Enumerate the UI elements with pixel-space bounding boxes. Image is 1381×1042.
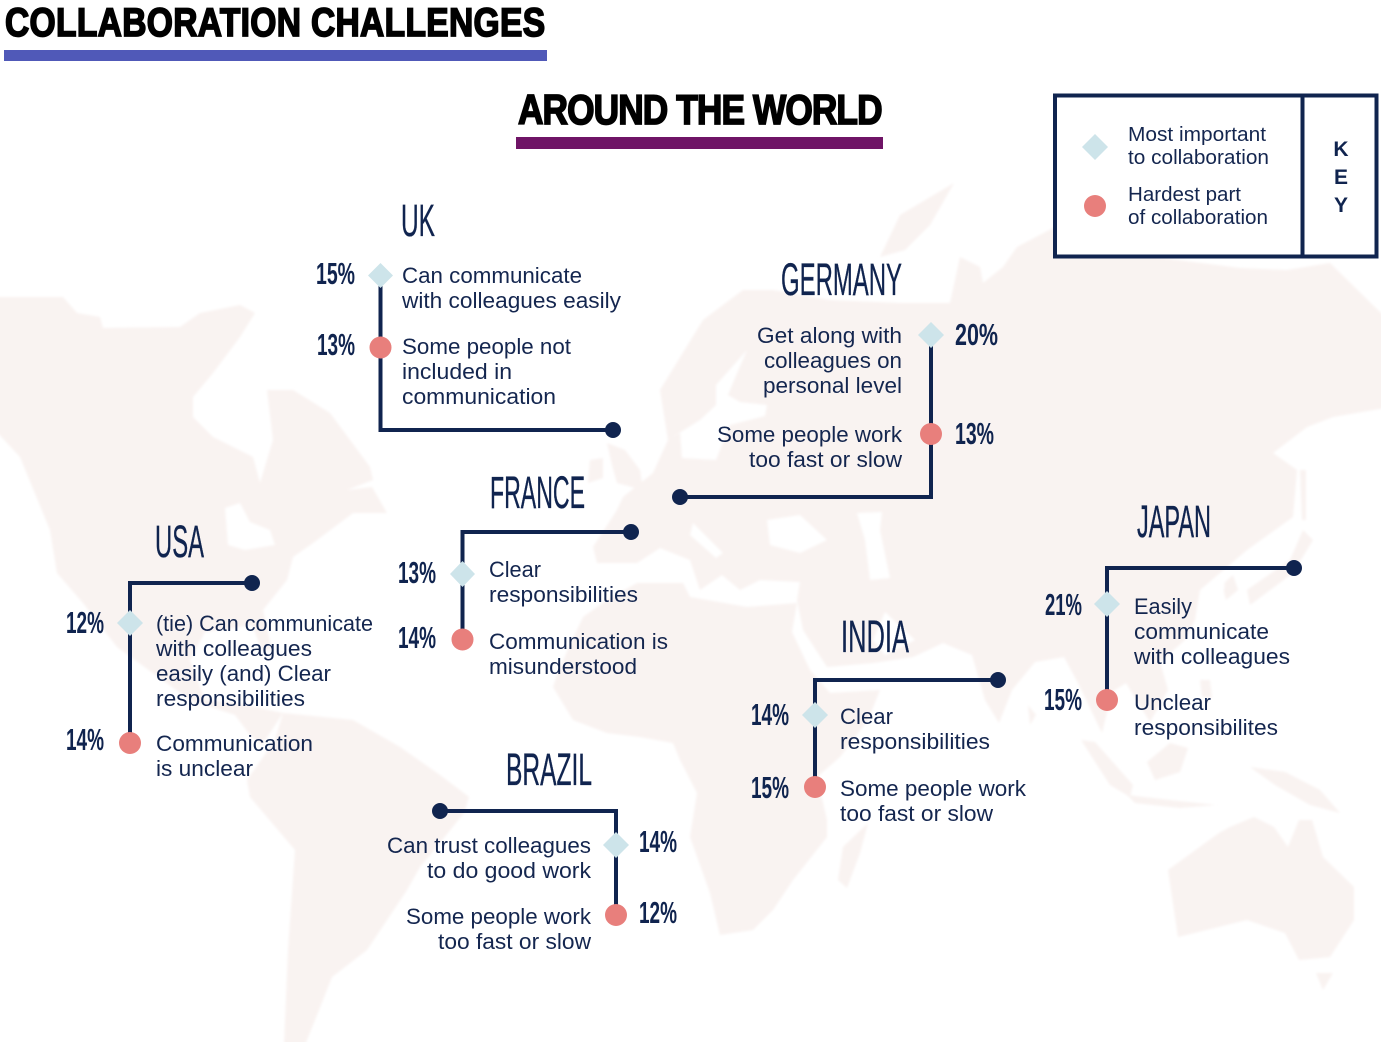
icon: France diamond [450,561,475,587]
text: Germany hardest: Some people work [717,422,903,447]
heading: Brazil: BRAZIL [506,744,592,795]
text: France hardest: Communication is [489,629,668,654]
panel: Japan [1044,496,1302,740]
text: India most important: responsibilities [840,729,990,754]
text: Brazil most important: to do good work [427,858,592,883]
key text: most important [1128,124,1269,169]
icon: Brazil dot [432,803,448,819]
heading: India: INDIA [841,611,909,662]
text: Brazil most important [387,833,592,883]
text: UK most important [401,263,621,313]
icon: India dot [990,672,1006,688]
text: India hardest [840,776,1027,826]
text: Germany hardest [717,422,903,472]
key text: hardest part [1128,184,1268,229]
value: Japan 15%: 15% [1044,682,1082,717]
value: Brazil 14%: 14% [639,824,677,859]
key label [1333,138,1349,217]
value: Germany 13%: 13% [955,416,994,451]
connector: UK [380,275,613,430]
panel: Germany [672,254,998,505]
value: Brazil 12%: 12% [639,895,677,930]
text: India most important [840,704,990,754]
title: COLLABORATION CHALLENGES [5,0,545,45]
text: France hardest [489,629,668,679]
value: India 15%: 15% [751,770,789,805]
text: France hardest: misunderstood [489,654,637,679]
text: Japan most important: communicate [1134,619,1269,644]
text: USA most important [155,611,373,711]
icon: USA circle [119,732,141,754]
icon: Japan circle [1096,689,1118,711]
icon: France circle [452,628,474,650]
icon: UK diamond [368,263,393,288]
text: Brazil hardest: too fast or slow [438,929,591,954]
connector: Germany [680,335,931,497]
text: Japan most important: with colleagues [1133,644,1290,669]
icon: Japan diamond [1094,591,1120,617]
text: USA most important: (tie) Can communicate [156,611,373,636]
key label: Y [1334,194,1348,217]
key text: hardest part: Hardest part [1128,184,1241,206]
icon: diamond key [1082,134,1108,160]
heading: Japan: JAPAN [1137,496,1211,547]
text: India most important: Clear [840,704,893,729]
text: USA most important: easily (and) Clear [156,661,331,686]
text: France most important: responsibilities [489,582,638,607]
text: UK most important: Can communicate [402,263,582,288]
icon: USA dot [244,575,260,591]
icon: UK dot [605,422,621,438]
text: France most important [489,557,638,607]
icon: USA diamond [117,610,143,636]
icon: Brazil diamond [603,832,629,858]
text: Japan hardest: responsibilites [1134,715,1278,740]
text: Japan hardest [1134,690,1278,740]
value: Germany 20%: 20% [955,317,998,352]
key text: most important: to collaboration [1128,147,1269,169]
text: Germany hardest: too fast or slow [749,447,902,472]
panel: India [751,611,1027,826]
text: Brazil hardest [406,904,592,954]
subtitle: AROUND THE WORLD [518,87,883,134]
value: UK 15%: 15% [316,256,355,291]
icon: India circle [804,776,826,798]
heading: France: FRANCE [490,467,585,518]
icon: Japan dot [1286,560,1302,576]
text: Germany most important: colleagues on [764,348,902,373]
value: France 14%: 14% [398,620,436,655]
text: USA most important: responsibilities [156,686,305,711]
text: UK most important: with colleagues easily [401,288,621,313]
value: India 14%: 14% [751,697,789,732]
text: Germany most important: Get along with [757,323,902,348]
connector: France [462,532,631,639]
value: USA 12%: 12% [66,605,104,640]
text: India hardest: too fast or slow [840,801,993,826]
text: Japan most important [1133,594,1290,669]
icon: Germany dot [672,489,688,505]
panel: Brazil [387,744,677,954]
value: UK 13%: 13% [317,327,355,362]
heading: USA: USA [155,516,204,567]
key text: hardest part: of collaboration [1128,207,1268,229]
icon: UK circle [370,336,392,358]
map inland water [225,350,1225,655]
value: Japan 21%: 21% [1045,587,1082,622]
text: Brazil hardest: Some people work [406,904,592,929]
panel: USA [66,516,373,781]
connector: India [815,680,998,787]
text: Japan most important: Easily [1134,594,1192,619]
connector: Japan [1107,568,1294,700]
panel: France [398,467,668,679]
text: France most important: Clear [489,557,541,582]
text: USA most important: with colleagues [155,636,312,661]
connector: USA [130,583,252,743]
heading: UK: UK [401,195,435,246]
text: India hardest: Some people work [840,776,1027,801]
value: USA 14%: 14% [66,722,104,757]
text: UK hardest: communication [402,384,556,409]
text: Germany most important: personal level [763,373,902,398]
key label: E [1334,166,1348,189]
text: UK hardest: included in [402,359,512,384]
text: UK hardest [402,334,571,409]
text: Japan hardest: Unclear [1134,690,1211,715]
icon: France dot [623,524,639,540]
key label: K [1333,138,1349,161]
icon: Brazil circle [605,904,627,926]
text: UK hardest: Some people not [402,334,571,359]
icon: India diamond [802,702,828,728]
panel: UK [316,195,621,438]
text: USA hardest [156,731,313,781]
value: France 13%: 13% [398,555,436,590]
panel: key [1055,95,1376,257]
icon: Germany circle [920,423,942,445]
text: USA hardest: Communication [156,731,313,756]
text: Brazil most important: Can trust colleagues [387,833,591,858]
text: Germany most important [757,323,902,398]
icon: Germany diamond [918,322,944,348]
key text: most important: Most important [1128,124,1266,146]
icon: circle key [1084,195,1106,217]
connector: Brazil [440,811,616,915]
heading: Germany: GERMANY [781,254,902,305]
text: USA hardest: is unclear [156,756,253,781]
